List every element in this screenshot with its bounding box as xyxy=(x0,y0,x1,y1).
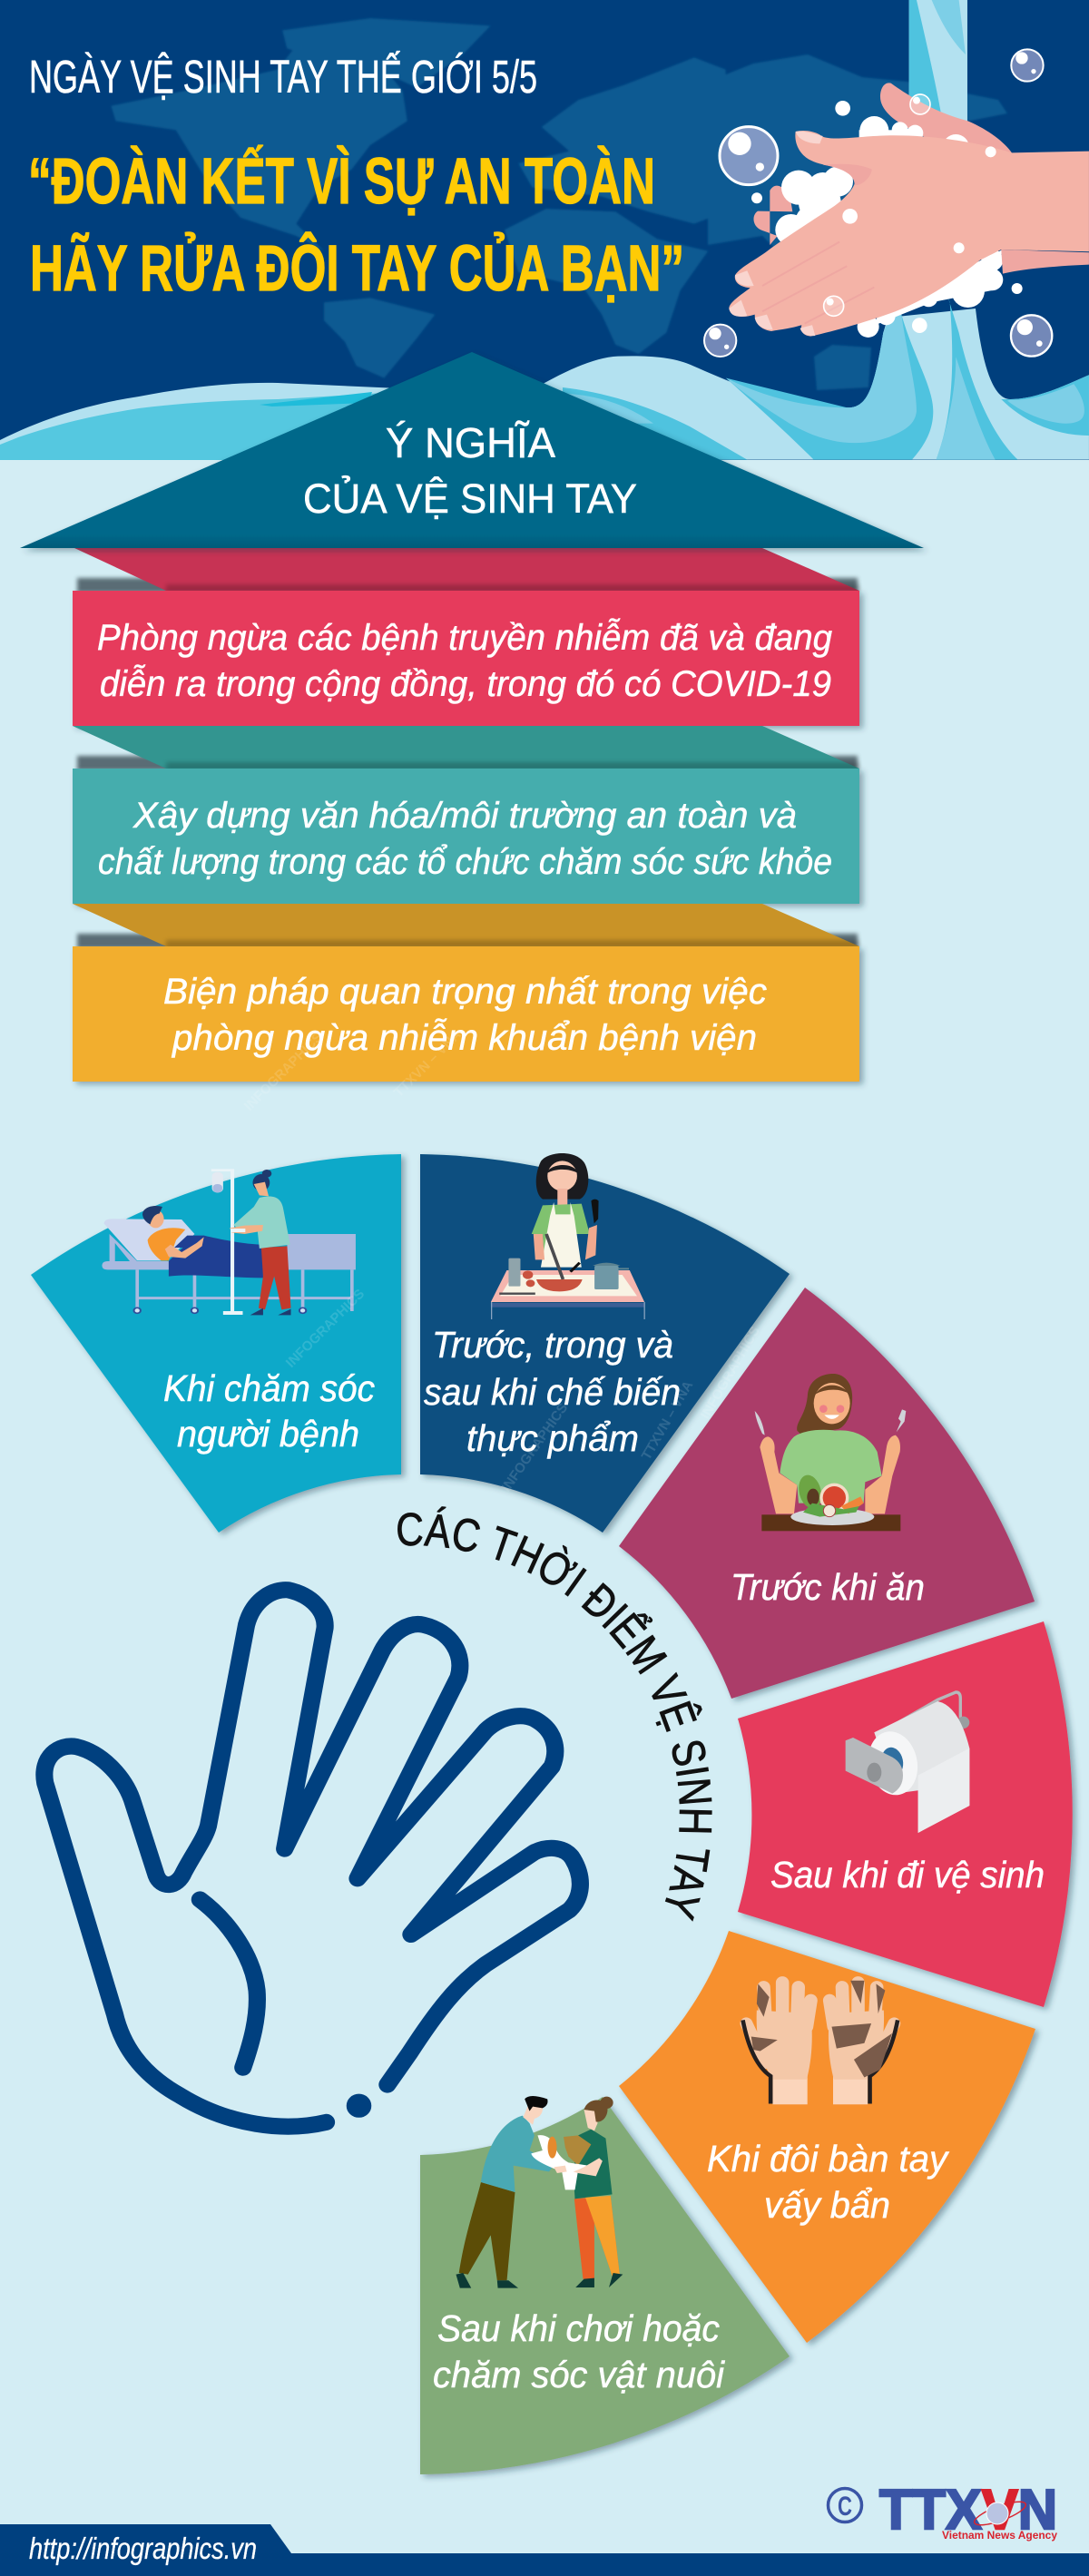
washing hands illustration xyxy=(704,49,1089,357)
circular title xyxy=(396,1545,680,1911)
sector: after pets xyxy=(420,2096,790,2474)
main title: HÃY RỬA ĐÔI TAY CỦA BẠN” xyxy=(30,232,684,305)
main title xyxy=(28,146,684,305)
band: infection control: phòng ngừa nhiễm khuẩn bệnh viện xyxy=(172,1017,757,1058)
label xyxy=(163,1367,375,1455)
watermarks: INFOGRAPHICS xyxy=(498,1400,571,1494)
panel heading: triangle roof: Ý NGHĨA xyxy=(386,419,555,466)
water stream and right wave xyxy=(526,0,1089,460)
band: infection control: Biện pháp quan trọng nhất trong việc xyxy=(163,972,767,1012)
icon: woman eating xyxy=(755,1374,906,1531)
icon: dirty hands xyxy=(743,1981,898,2104)
sector: before eating xyxy=(619,1288,1035,1699)
subtitle: world hand hygiene day: NGÀY VỆ SINH TAY THẾ GIỚI 5/5 xyxy=(29,50,537,103)
band: disease prevention: diễn ra trong cộng đồng, trong đó có COVID-19 xyxy=(100,663,831,704)
label: Khi chăm sóc xyxy=(163,1367,375,1409)
label xyxy=(433,2307,726,2395)
label: thực phẩm xyxy=(466,1417,639,1459)
label xyxy=(707,2138,949,2226)
soap foam xyxy=(775,116,1003,338)
watermarks xyxy=(241,1027,763,1494)
world map background xyxy=(111,18,1007,390)
sector: food preparation xyxy=(420,1153,790,1533)
band: safety culture: chất lượng trong các tổ chức chăm sóc sức khỏe xyxy=(98,842,832,882)
icon: couple with pets xyxy=(456,2096,623,2288)
sector: dirty hands xyxy=(619,1931,1035,2343)
watermarks: INFOGRAPHICS xyxy=(283,1286,368,1371)
label: Sau khi đi vệ sinh xyxy=(770,1854,1045,1895)
header banner xyxy=(0,0,1089,460)
watermarks: TTXVN – VNA xyxy=(639,1378,696,1463)
label: Trước, trong và xyxy=(432,1324,673,1366)
icon: nurse and patient xyxy=(102,1169,356,1315)
watermarks: TTXVN – VNA xyxy=(391,1027,465,1101)
icon: toilet paper roll xyxy=(846,1692,969,1833)
band: disease prevention xyxy=(73,548,859,726)
watermarks: INFOGRAPHICS xyxy=(698,1324,763,1422)
panel heading: triangle roof xyxy=(20,352,924,548)
label: sau khi chế biến xyxy=(424,1371,681,1413)
band: safety culture: Xây dựng văn hóa/môi trường an toàn và xyxy=(132,796,797,836)
label: Trước khi ăn xyxy=(731,1566,925,1608)
icon: hand outline xyxy=(44,1590,580,2127)
footer bar xyxy=(0,2524,1089,2576)
main title: “ĐOÀN KẾT VÌ SỰ AN TOÀN xyxy=(28,146,655,218)
band: safety culture xyxy=(73,726,859,904)
panel: meaning of hand hygiene xyxy=(73,548,859,1082)
label: Sau khi chơi hoặc xyxy=(437,2307,720,2349)
label: vấy bẩn xyxy=(764,2184,890,2226)
panel heading: triangle roof: CỦA VỆ SINH TAY xyxy=(303,475,637,522)
band: disease prevention: Phòng ngừa các bệnh truyền nhiễm đã và đang xyxy=(97,617,832,658)
sector: caring for patients xyxy=(31,1154,401,1533)
soap bubbles xyxy=(704,49,1052,357)
band: infection control xyxy=(73,904,859,1082)
logo: copyright and TTXVN: TTXVN xyxy=(879,2479,1057,2542)
logo: copyright and TTXVN: Vietnam News Agency xyxy=(942,2529,1057,2542)
label xyxy=(424,1324,681,1459)
footer bar: http://infographics.vn xyxy=(29,2532,257,2565)
logo: copyright and TTXVN: C xyxy=(838,2492,852,2522)
curved text: CÁC THỜI ĐIỂM VỆ SINH TAY xyxy=(397,1506,712,1922)
label: người bệnh xyxy=(177,1413,359,1455)
left wave xyxy=(0,383,399,460)
label: Khi đôi bàn tay xyxy=(707,2138,949,2179)
watermarks: INFOGRAPHICS xyxy=(241,1029,326,1114)
label: chăm sóc vật nuôi xyxy=(433,2354,726,2395)
icon: woman cooking xyxy=(491,1153,644,1319)
sector: after using the toilet xyxy=(738,1621,1073,2007)
